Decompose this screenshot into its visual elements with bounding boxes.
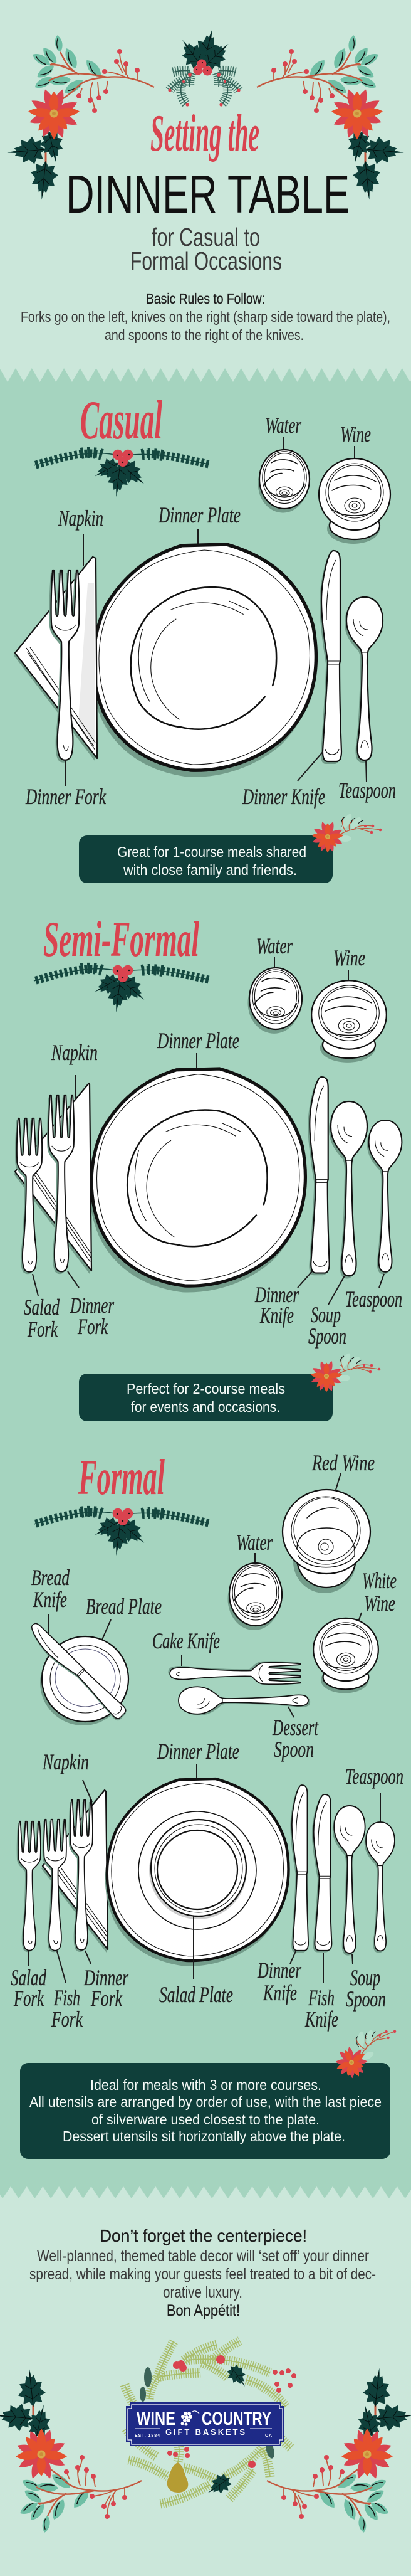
callout: formal: Ideal for meals with 3 or more courses. (90, 2077, 321, 2093)
bread plate and bread knife: Bread (31, 1565, 70, 1590)
text block: centerpiece (29, 2226, 376, 2319)
teaspoon (345, 1764, 403, 1953)
dinner plate (90, 1028, 305, 1293)
cake knife (152, 1628, 300, 1684)
panel: header (6, 26, 405, 343)
dessert spoon (179, 1687, 319, 1762)
callout: formal (20, 2015, 407, 2159)
water glass (227, 1530, 282, 1630)
dinner fork (25, 570, 107, 809)
logo: Wine Country Gift Baskets: EST. 1884 (135, 2434, 160, 2438)
text block: centerpiece: Bon Appétit! (167, 2302, 240, 2319)
wine glass: Wine (340, 421, 371, 447)
dinner fork: Dinner (83, 1965, 129, 1990)
napkin (14, 506, 103, 761)
soup spoon (333, 1806, 386, 2012)
dessert spoon: Spoon (274, 1737, 314, 1762)
text block: basic rules: and spoons to the right of the knives. (105, 327, 304, 343)
soup spoon: Soup (311, 1302, 341, 1327)
salad fork: Salad (24, 1295, 60, 1320)
red wine glass (283, 1450, 375, 1593)
dinner knife: Knife (259, 1303, 294, 1328)
dinner plate: Dinner Plate (157, 1028, 239, 1053)
fish knife (304, 1794, 338, 2032)
white wine glass: Wine (364, 1591, 395, 1616)
dinner plate (91, 502, 316, 777)
callout: semi-formal (79, 1352, 380, 1421)
napkin (41, 1749, 108, 1953)
title (66, 104, 350, 275)
dinner knife: Dinner Knife (242, 784, 325, 809)
icon: holly sprig (34, 1508, 209, 1557)
napkin: Napkin (42, 1749, 89, 1774)
icon: holly sprig (34, 965, 209, 1014)
title: for Casual to (152, 223, 260, 252)
dinner fork: Dinner (70, 1293, 115, 1318)
soup spoon: Spoon (346, 1986, 386, 2012)
red wine glass: Red Wine (311, 1450, 375, 1475)
panel: formal setting (11, 1450, 407, 2159)
wreath (125, 2341, 296, 2504)
callout: casual: Great for 1-course meals shared (117, 844, 306, 860)
fish fork: Fish (53, 1985, 80, 2010)
panel: semi-formal setting (14, 912, 402, 1421)
floral corner: bottom right (267, 2367, 411, 2533)
heading: Semi-Formal: Semi-Formal (43, 912, 199, 967)
panel: casual setting (14, 390, 396, 883)
callout: formal: of silverware used closest to the plate. (91, 2111, 320, 2128)
dinner fork: Dinner Fork (25, 784, 107, 809)
background: mint main panel (0, 382, 411, 2198)
bread plate and bread knife: Bread Plate (86, 1594, 162, 1619)
cake knife: Cake Knife (152, 1628, 220, 1653)
dinner knife (254, 1077, 330, 1328)
dinner fork: Fork (77, 1314, 108, 1339)
icon: holly sprig (34, 450, 209, 499)
panel: footer (0, 2226, 411, 2533)
bread plate and bread knife (25, 1565, 162, 1725)
dinner fork: Fork (90, 1986, 123, 2011)
callout: formal: All utensils are arranged by order of use, with the last piece (29, 2094, 382, 2110)
dinner knife (257, 1785, 308, 2005)
salad fork (15, 1118, 60, 1342)
title: Formal Occasions (130, 246, 282, 275)
icon: pine and holly ornament (168, 26, 241, 107)
top zigzag edge (0, 368, 411, 382)
dessert spoon: Dessert (272, 1715, 319, 1740)
callout: semi-formal: for events and occasions. (131, 1399, 280, 1415)
text block: basic rules: Basic Rules to Follow: (146, 290, 265, 307)
dinner fork (47, 1095, 115, 1339)
dinner knife (242, 551, 341, 809)
salad fork (11, 1821, 47, 2011)
text block: basic rules (21, 290, 390, 343)
dinner plate: Dinner Plate (158, 502, 241, 527)
water glass: Water (256, 933, 293, 958)
wine glass: Wine (333, 945, 365, 970)
soup spoon: Soup (350, 1965, 380, 1990)
logo: Wine Country Gift Baskets: CA (265, 2434, 272, 2438)
water glass: Water (265, 413, 302, 438)
dinner plate with salad plate: Dinner Plate (157, 1739, 239, 1764)
dinner plate with salad plate (105, 1739, 289, 2007)
text block: centerpiece: Don’t forget the centerpiece! (100, 2226, 307, 2245)
soup spoon: Spoon (308, 1323, 346, 1349)
logo: Wine Country Gift Baskets: WINE (137, 2409, 175, 2429)
water glass (258, 413, 310, 513)
logo: Wine Country Gift Baskets (126, 2402, 284, 2446)
dinner knife: Dinner (254, 1282, 299, 1307)
salad fork: Salad (11, 1965, 47, 1990)
bottom zigzag edge (0, 2186, 411, 2198)
napkin: Napkin (58, 506, 103, 531)
heading: Casual: Casual (80, 390, 162, 451)
fish fork (43, 1820, 83, 2032)
dinner plate with salad plate: Salad Plate (159, 1982, 233, 2007)
floral corner: top left (6, 34, 154, 201)
callout: casual: with close family and friends. (123, 862, 297, 878)
title: Setting the (150, 104, 259, 162)
bread plate and bread knife: Knife (33, 1587, 67, 1612)
salad fork: Fork (13, 1986, 44, 2011)
fish fork: Fork (51, 2006, 83, 2032)
white wine glass (313, 1568, 397, 1693)
floral corner: top right (257, 34, 405, 201)
fish knife: Knife (304, 2006, 338, 2032)
floral corner: bottom left (0, 2367, 142, 2533)
teaspoon (338, 597, 396, 803)
heading: Formal: Formal (78, 1450, 165, 1505)
salad fork: Fork (27, 1317, 58, 1342)
callout: formal: Dessert utensils sit horizontally above the plate. (63, 2128, 345, 2144)
dinner knife: Dinner (257, 1958, 302, 1983)
logo: Wine Country Gift Baskets: GIFT BASKETS (165, 2427, 245, 2437)
teaspoon (345, 1120, 402, 1312)
callout: casual (79, 812, 382, 883)
water glass: Water (236, 1530, 273, 1555)
logo: Wine Country Gift Baskets: COUNTRY (202, 2409, 271, 2429)
dinner fork (69, 1800, 129, 2011)
wine glass (311, 945, 387, 1063)
wine glass (319, 421, 390, 544)
dinner knife: Knife (263, 1980, 297, 2005)
napkin (14, 1040, 98, 1274)
fish knife: Fish (308, 1985, 335, 2010)
soup spoon (308, 1101, 367, 1349)
text block: centerpiece: orative luxury. (163, 2284, 242, 2301)
callout: semi-formal: Perfect for 2-course meals (127, 1381, 285, 1397)
napkin: Napkin (51, 1040, 98, 1065)
water glass (247, 933, 302, 1034)
